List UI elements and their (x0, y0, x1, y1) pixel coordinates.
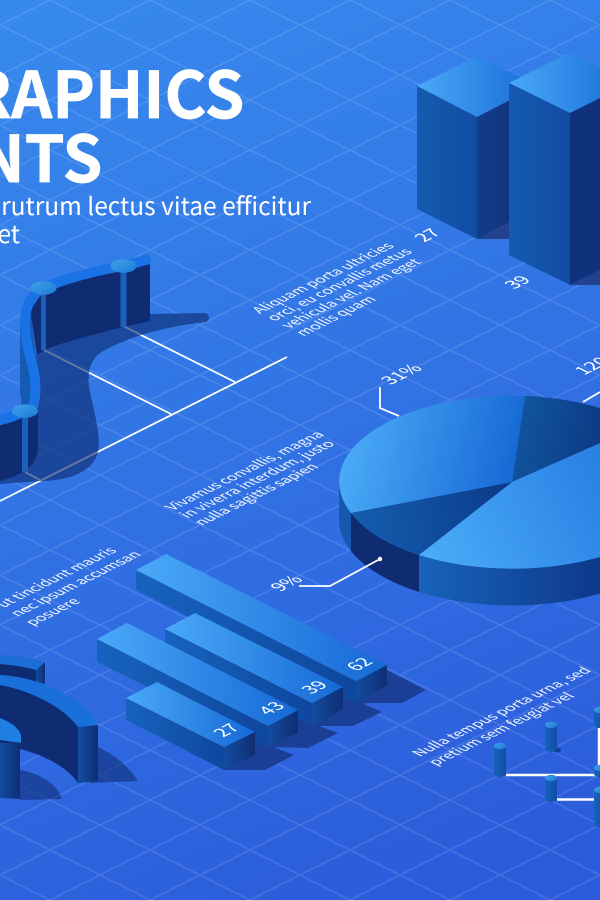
text block: Nulla: pretium sem feugiat vel (422, 689, 580, 768)
text block: Vivamus: Vivamus convallis, magna (159, 428, 330, 513)
cylinder 6 (594, 787, 600, 827)
bar: 39: 39 (293, 677, 334, 697)
data points (12, 259, 136, 418)
posts (22, 270, 126, 472)
text block: Aliquam: mollis quam (289, 292, 382, 339)
slice: large (419, 425, 600, 569)
text block: Aliquam: vehicula vel. Nam eget (275, 255, 427, 331)
inner arc (0, 718, 21, 799)
label: 9%: 9% (262, 571, 309, 595)
cylinder 1 (494, 743, 506, 777)
text block: tincidunt: posuere (19, 595, 86, 628)
text block: Aliquam: Aliquam porta ultricies (246, 239, 400, 316)
text block: Vivamus: in viverra interdum, justo (173, 437, 340, 521)
bar: 62 (136, 554, 387, 703)
bar: 43: 43 (250, 698, 291, 718)
line chart (0, 259, 287, 501)
column chart (406, 53, 600, 292)
line chart shadow (0, 313, 209, 484)
cylinder 4 (594, 707, 600, 728)
label: 39: 39 (496, 272, 537, 292)
subtitle: rutrum lectus vitae efficitur (1, 188, 311, 223)
bar shadows (224, 670, 426, 770)
text block: Vivamus: nulla sagittis sapien (188, 460, 324, 528)
bar: 27 (126, 682, 255, 770)
arc shadows (20, 747, 138, 800)
column: 39 (509, 53, 600, 285)
cylinder chart (494, 707, 600, 827)
label: 27: 27 (406, 225, 447, 245)
title (0, 45, 244, 201)
bar: 62: 62 (338, 654, 379, 674)
slice: 31% (339, 396, 525, 513)
leader dot (378, 557, 382, 561)
bar chart (97, 554, 426, 770)
cylinder 3 (545, 775, 557, 802)
arc chart (0, 655, 138, 800)
ribbon walls (0, 264, 150, 481)
text block: Nulla: Nulla tempus porta urna, sed (406, 664, 597, 759)
slice: 120 (512, 396, 600, 482)
axis lines (0, 326, 287, 501)
leader lines (299, 387, 600, 586)
bar: 43 (97, 623, 298, 747)
cylinder 5 (594, 765, 600, 777)
label: 31%: 31% (373, 360, 429, 388)
subtitle (0, 188, 311, 251)
main arc (0, 675, 98, 783)
slice: 9% (351, 482, 512, 555)
bar: 39 (165, 613, 343, 726)
connector lines (506, 728, 599, 800)
small outer arc (0, 655, 45, 684)
ribbon line (0, 260, 146, 420)
pie chart (262, 346, 600, 605)
pie side (339, 481, 600, 605)
text block: tincidunt: nec ipsum accumsan (4, 548, 147, 619)
column: 27 (417, 56, 537, 239)
text block: Aliquam (246, 239, 427, 339)
bar: 27: 27 (205, 720, 246, 740)
text block: Aliquam: orci, eu convallis metus (260, 245, 418, 324)
cylinder 2 (545, 722, 561, 752)
